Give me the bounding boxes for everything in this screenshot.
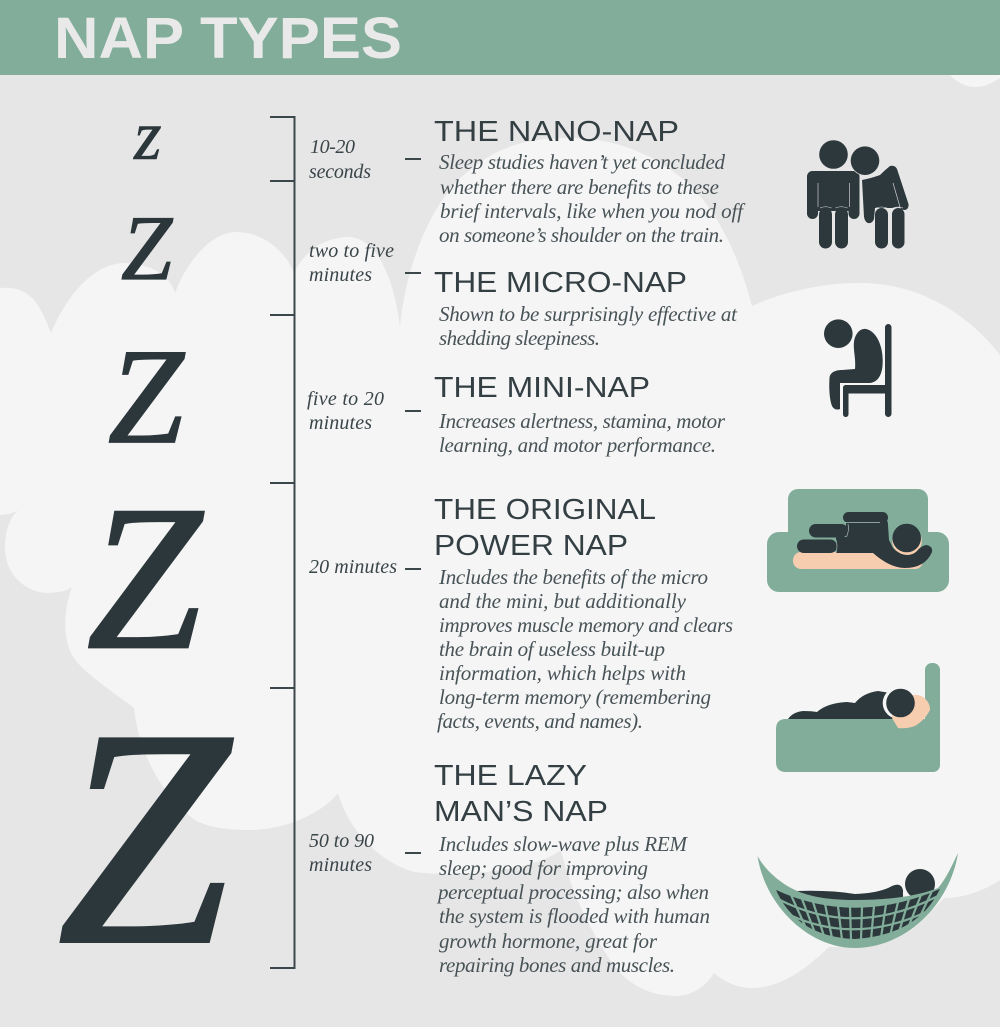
description: micro-nap: shedding sleepiness. <box>439 326 600 350</box>
panel: micro-nap <box>434 267 738 350</box>
panel: original power nap <box>434 494 733 733</box>
title: NAP TYPES <box>54 6 402 71</box>
duration labels: minutes <box>309 264 372 286</box>
heading: nano-nap: THE NANO-NAP <box>434 116 679 148</box>
description: original power nap: and the mini, but additionally <box>439 589 687 613</box>
duration labels <box>307 136 397 876</box>
description: nano-nap: on someone’s shoulder on the train. <box>439 223 724 247</box>
heading: lazy man's nap: THE LAZY <box>434 760 587 792</box>
description: original power nap: Includes the benefits of the micro <box>438 565 708 589</box>
duration labels: minutes <box>309 854 372 876</box>
growing z letters: Z <box>58 667 236 1008</box>
description: original power nap: facts, events, and names). <box>437 709 643 733</box>
icon: person dozing on a shoulder <box>807 140 909 248</box>
duration labels: 10-20 <box>310 136 355 158</box>
panel: mini-nap <box>434 372 726 457</box>
description: nano-nap: whether there are benefits to these <box>440 175 719 199</box>
icon: person on a sofa <box>767 489 949 592</box>
icon: person slumped on a chair <box>824 319 892 417</box>
growing z letters: Z <box>87 463 204 692</box>
duration labels: five to 20 <box>307 388 384 410</box>
description: micro-nap: Shown to be surprisingly effective at <box>439 302 738 326</box>
duration labels: minutes <box>309 412 372 434</box>
panel: nano-nap <box>434 116 746 247</box>
duration labels: seconds <box>309 161 371 183</box>
heading: mini-nap: THE MINI-NAP <box>434 372 650 404</box>
description: mini-nap <box>438 409 726 457</box>
heading: micro-nap: THE MICRO-NAP <box>434 267 687 299</box>
duration labels: 20 minutes <box>309 556 397 578</box>
description: lazy man's nap: perceptual processing; also when <box>436 880 709 904</box>
description: lazy man's nap: repairing bones and muscles. <box>439 953 675 977</box>
heading: original power nap <box>434 494 656 562</box>
description: lazy man's nap <box>436 832 710 977</box>
duration labels: 50 to 90 <box>309 830 374 852</box>
growing z letters: Z <box>108 322 185 472</box>
description: nano-nap: Sleep studies haven’t yet concluded <box>439 150 726 174</box>
growing z letters: Z <box>121 197 173 299</box>
description: mini-nap: learning, and motor performance. <box>439 433 716 457</box>
heading: original power nap: POWER NAP <box>434 530 628 562</box>
description: lazy man's nap: growth hormone, great for <box>439 929 658 953</box>
description: nano-nap: brief intervals, like when you nod off <box>440 199 746 223</box>
connector dashes <box>405 159 421 853</box>
time scale bracket <box>270 117 294 968</box>
growing z letters <box>58 97 236 1008</box>
description: lazy man's nap: sleep; good for improving <box>439 856 648 880</box>
description: nano-nap <box>439 150 746 247</box>
description: original power nap: long-term memory (remembering <box>439 685 711 709</box>
description: original power nap: improves muscle memory and clears <box>439 613 733 637</box>
duration labels: two to five <box>309 240 394 262</box>
header band <box>0 0 1000 75</box>
description: lazy man's nap: the system is flooded with human <box>439 904 710 928</box>
panel: lazy man's nap <box>434 760 710 977</box>
description: original power nap: information, which helps with <box>439 661 686 685</box>
description: micro-nap <box>439 302 738 350</box>
heading: lazy man's nap <box>434 760 608 828</box>
heading: original power nap: THE ORIGINAL <box>434 494 656 526</box>
heading: lazy man's nap: MAN’S NAP <box>434 796 608 828</box>
description: lazy man's nap: Includes slow-wave plus REM <box>438 832 688 856</box>
description: mini-nap: Increases alertness, stamina, motor <box>438 409 726 433</box>
description: original power nap <box>437 565 733 733</box>
icon: person on a daybed <box>776 663 940 772</box>
description: original power nap: the brain of useless built-up <box>439 637 665 661</box>
icon: person in a hammock <box>758 853 958 948</box>
growing z letters: z <box>133 97 162 175</box>
